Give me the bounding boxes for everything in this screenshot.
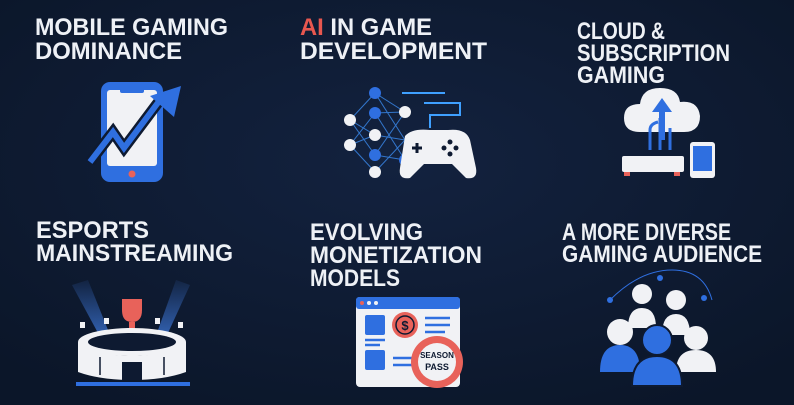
icon: group of people: [600, 270, 716, 386]
panel: esports: [36, 217, 233, 386]
heading: AI in game development: [300, 14, 487, 65]
heading: a more diverse gaming audience: GAMING AUDIENCE: [562, 241, 762, 268]
heading: evolving monetization models: [310, 219, 482, 292]
panel: AI in game development: [300, 14, 487, 178]
heading: AI in game development: DEVELOPMENT: [300, 38, 487, 65]
heading: cloud and subscription gaming: SUBSCRIPTION: [577, 40, 730, 67]
heading: mobile gaming dominance: DOMINANCE: [35, 38, 182, 65]
heading: cloud and subscription gaming: CLOUD &: [577, 18, 665, 45]
panel: monetization: [310, 219, 482, 388]
heading: cloud and subscription gaming: GAMING: [577, 62, 665, 89]
heading: a more diverse gaming audience: [562, 219, 762, 268]
icon: cloud with console and tablet: [622, 88, 715, 178]
heading: evolving monetization models: MONETIZATION: [310, 242, 482, 269]
panel: diverse audience: [562, 219, 762, 386]
heading: esports mainstreaming: MAINSTREAMING: [36, 240, 233, 267]
icon: phone with growth arrow: [90, 82, 181, 182]
heading: esports mainstreaming: [36, 217, 233, 267]
icon: store window with season pass: PASS: [425, 362, 449, 372]
icon: store window with season pass: [356, 297, 463, 388]
panel: cloud gaming: [577, 18, 730, 178]
heading: mobile gaming dominance: [35, 14, 228, 65]
heading: mobile gaming dominance: MOBILE GAMING: [35, 14, 228, 41]
heading: cloud and subscription gaming: [577, 18, 730, 89]
heading: a more diverse gaming audience: A MORE DIVERSE: [562, 219, 731, 246]
heading: esports mainstreaming: ESPORTS: [36, 217, 149, 244]
heading: evolving monetization models: EVOLVING: [310, 219, 423, 246]
heading: AI in game development: AI IN GAME: [300, 14, 432, 41]
panel: mobile gaming: [35, 14, 228, 182]
icon: store window with season pass: SEASON: [420, 351, 454, 360]
icon: neural network and controller: [344, 87, 476, 178]
heading: evolving monetization models: MODELS: [310, 265, 400, 292]
icon: stadium with trophy: [72, 280, 190, 386]
icon: store window with season pass: $: [401, 318, 409, 333]
